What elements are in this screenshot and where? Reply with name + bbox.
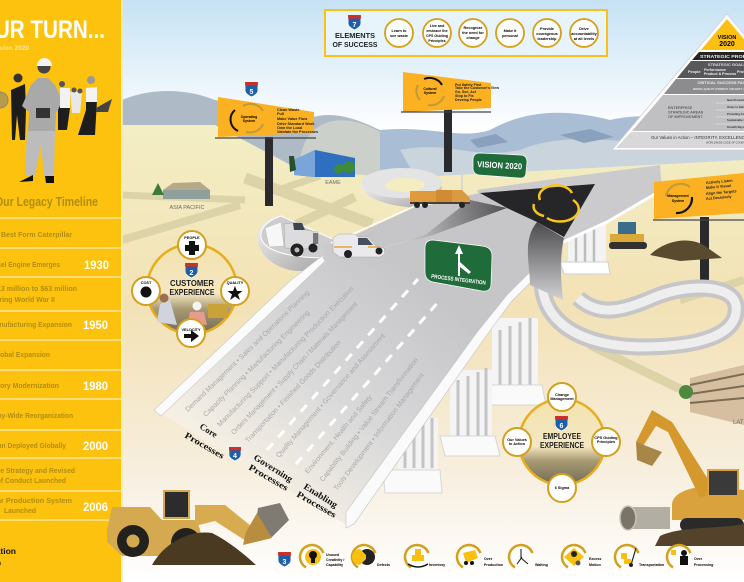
shield: 7: 7: [353, 22, 357, 29]
billboard: operating system: Make Value Flow: [277, 117, 307, 121]
icon: excess motion: Excess: [589, 557, 601, 561]
panel: left sidebar: [0, 0, 123, 582]
icon: over production: Over: [484, 557, 493, 561]
billboard: operating system: System: [243, 119, 255, 123]
pyramid: [612, 14, 744, 150]
photo figures: [157, 294, 228, 325]
dirt pile: excavator: [655, 524, 744, 546]
white semi truck: [265, 222, 319, 256]
sign: Vision 2020: [462, 153, 527, 190]
sign: Process Integration: PROCESS INTEGRATION: [431, 274, 486, 287]
billboard: cultural system: [401, 72, 499, 112]
category labels: [183, 421, 340, 520]
mountains: [122, 91, 744, 185]
element: courageous leadership: leadership: [538, 37, 557, 41]
bulldozer: right: [609, 222, 647, 249]
icon: waiting: [505, 541, 548, 573]
ground: [120, 125, 744, 582]
orange tanker truck: [410, 190, 470, 208]
billboard: operating system: Clean Waste: [277, 108, 299, 112]
right barrier: [346, 272, 533, 528]
timeline years: 2006: [83, 500, 108, 514]
timeline years: 1980: [83, 379, 108, 393]
timeline years: 1930: [84, 258, 109, 272]
legend: eight wastes: [296, 541, 713, 573]
process labels on road: Manufacturing Support • Manufacturing Production Execution: [216, 286, 355, 428]
upper rim: [331, 198, 470, 243]
process labels on road: Transportation • Finished Goods Distribution: [244, 339, 343, 444]
icon: unused creativity: Creativity /: [326, 558, 344, 562]
billboard: cultural system: Stop to Fix: [455, 94, 474, 98]
node: cost: COST: [141, 281, 152, 285]
element: courageous leadership: Provide: [540, 27, 554, 31]
billboard: management system: Act Decisively: [706, 195, 733, 201]
category labels: Processes: [183, 430, 227, 461]
shield: 3: [278, 552, 291, 567]
timeline years: 1950: [83, 318, 108, 332]
element: courageous leadership: courageous: [536, 32, 558, 36]
billboard: cultural system: System: [424, 91, 436, 95]
arm white edge: [563, 194, 655, 242]
upper road dark shadow: [375, 200, 507, 250]
element: courageous leadership: [533, 19, 561, 47]
element: live and embrace: CPS Guiding: [426, 34, 448, 38]
building: Asia Pacific: [152, 182, 210, 211]
billboard: cultural system: Take the Customer's View: [455, 86, 499, 90]
element: recognize the need: the need for: [462, 31, 484, 35]
billboard: operating system: [215, 97, 318, 138]
node: guiding principles: [592, 428, 620, 456]
process labels on road: Demand Management • Sales and Operations Planning: [185, 290, 311, 413]
heading: CUSTOMER: [170, 278, 214, 288]
building: Latin America: [679, 365, 744, 426]
process labels on road: Capacity Planning • Manufacturing Engineering: [202, 309, 311, 418]
panel: employee experience: [503, 383, 620, 502]
billboard pole: cultural: [444, 108, 452, 172]
node: quality: QUALITY: [227, 281, 244, 285]
category labels: Governing: [252, 452, 295, 484]
icon: circular arrows: [534, 185, 579, 221]
node: guiding principles: Principles: [597, 440, 615, 444]
icon: transportation: [611, 541, 664, 573]
icon: inventory: Inventory: [429, 563, 445, 567]
pyramid tier: vision 2020: VISION: [718, 35, 736, 41]
building: Latin America: LAT: [733, 420, 744, 426]
category labels: Enabling: [302, 481, 340, 510]
icon: unused creativity: Capability: [326, 563, 343, 567]
icon: waiting: Waiting: [535, 563, 548, 567]
icon: over processing: Processing: [694, 563, 713, 567]
category labels: Core: [198, 421, 219, 440]
icon: over processing: Over: [694, 557, 703, 561]
icon: excess motion: Motion: [589, 563, 601, 567]
timeline years: [83, 258, 109, 514]
node: people: PEOPLE: [184, 236, 200, 240]
pyramid tier: strategic goals: [677, 61, 744, 78]
panel: customer experience: [132, 231, 249, 347]
billboard: operating system: Operating: [241, 115, 257, 119]
icon: inventory: [401, 541, 445, 573]
element: learn to see waste: [385, 19, 413, 47]
panel: customer experience: EXPERIENCE: [170, 287, 215, 297]
pyramid tier: enterprise areas: STRATEGIC AREAS: [668, 110, 704, 114]
shield: 2: 2: [190, 270, 194, 277]
element: live and embrace: [423, 19, 451, 47]
billboard: management system: Management: [667, 194, 690, 198]
element: live and embrace: embrace the: [426, 29, 448, 33]
wheel loader: [107, 491, 289, 558]
workers photo group: [0, 58, 112, 183]
building: Asia Pacific: ASIA PACIFIC: [169, 205, 205, 211]
shield: 5: 5: [250, 89, 254, 96]
black interchange wedge: [480, 184, 595, 237]
billboard pole: management: [700, 217, 709, 281]
ring ramp: [362, 168, 442, 208]
shield: 3: 3: [283, 559, 287, 566]
sign: Vision 2020: VISION 2020: [477, 159, 523, 171]
element: learn to see waste: see waste: [390, 34, 408, 38]
element: recognize the need: Recognize: [464, 26, 482, 30]
pyramid tier: strategic goals: Performance: [704, 68, 726, 72]
shield: 6: 6: [560, 423, 564, 430]
pyramid tier: strategic goals: Product & Process: [704, 72, 736, 76]
timeline years: 2000: [83, 439, 108, 453]
element: live and embrace: Live and: [430, 24, 444, 28]
pyramid tier: vision 2020: [701, 19, 744, 50]
center ramp: [528, 222, 564, 300]
icon: unused creativity: Unused: [326, 553, 339, 557]
pyramid tier: enterprise areas: [632, 95, 744, 131]
billboard: operating system: Own the Load: [277, 126, 303, 130]
pyramid tier: critical success factors: [664, 79, 744, 94]
billboard: cultural system: Put Safety First: [455, 83, 482, 87]
shield: 5: [245, 82, 258, 97]
process labels on road: [185, 286, 426, 492]
billboard: management system: Align the Targets: [706, 189, 737, 196]
footer text: [0, 546, 16, 567]
timeline events: [0, 230, 77, 515]
billboard: cultural system: Develop People: [455, 98, 482, 102]
node: our values: In Action: [509, 442, 526, 446]
ground paths: [122, 176, 744, 420]
node: change management: Management: [550, 397, 574, 401]
icon: transportation: Transportation: [639, 563, 664, 567]
billboard: operating system: Validate the Processes: [277, 130, 318, 134]
element: live and embrace: Principles: [428, 39, 446, 43]
process labels on road: Tools Development • Information Management: [333, 372, 426, 492]
left barrier: [154, 256, 325, 416]
highway surface: [160, 193, 537, 526]
dirt pile: right: [650, 240, 722, 261]
element: recognize the need: [459, 19, 487, 47]
shield: 4: 4: [233, 453, 237, 460]
node: 6 sigma: 6 Sigma: [555, 486, 570, 490]
icon: over processing: [663, 541, 713, 573]
lane dashes: [267, 279, 440, 464]
pillars: [383, 318, 546, 493]
element: drive accountability: Drive: [579, 27, 589, 31]
excavator: [636, 410, 744, 532]
icon: over production: Production: [484, 563, 503, 567]
billboard: operating system: Drive Standard Work: [277, 122, 315, 126]
process labels on road: Orders Management • Supply Chain / Materials Management: [230, 301, 359, 436]
icon: unused creativity: [296, 541, 344, 573]
pyramid tier: values in action: [616, 132, 744, 148]
heading: ELEMENTS: [335, 31, 375, 40]
billboard pole: operating: [265, 137, 273, 206]
billboard: management system: Actively Listen: [706, 179, 733, 185]
icon: over production: [453, 541, 503, 573]
element: drive accountability: [570, 19, 598, 47]
node: change management: Change: [555, 393, 569, 397]
right flyover arm: [477, 165, 662, 290]
process labels on road: Capability Building • Value Stream Transformation: [319, 357, 420, 483]
element: drive accountability: at all levels: [574, 37, 594, 41]
timeline dividers: [0, 218, 121, 520]
panel: seven elements of success: OF SUCCESS: [332, 40, 378, 49]
sky: [120, 0, 744, 130]
element: make it personal: personal: [502, 34, 518, 38]
element: drive accountability: accountability: [571, 32, 598, 36]
element: make it personal: Make it: [504, 29, 517, 33]
billboard: management system: [653, 173, 744, 220]
pyramid tier: vision 2020: 2020: [719, 41, 735, 48]
process labels on road: Quality Management • Governance and Assessment: [275, 332, 387, 459]
icon: defects: Defects: [377, 563, 390, 567]
node: velocity: VELOCITY: [182, 328, 201, 332]
pipe: [620, 506, 670, 530]
right swirl ramp: [542, 262, 736, 347]
white pickup truck: [333, 234, 385, 258]
pyramid tier: enterprise areas: OF IMPROVEMENT: [668, 115, 703, 119]
element: make it personal: [496, 19, 524, 47]
billboard: operating system: Pull: [277, 112, 284, 116]
shield: 4: [229, 447, 241, 461]
node: guiding principles: CPS Guiding: [594, 436, 618, 440]
category labels: Processes: [247, 462, 291, 493]
building: EAME: EAME: [325, 180, 341, 186]
node: our values: Our Values: [507, 438, 527, 442]
panel: seven elements of success: [325, 10, 607, 56]
process labels on road: Environment, Health and Safety: [304, 394, 374, 475]
billboard: cultural system: Cultural: [423, 87, 437, 91]
dirt pile: foreground: [152, 533, 256, 565]
billboard: cultural system: Go, See, Act: [455, 90, 477, 94]
sign: Process Integration: [425, 240, 492, 291]
panel: employee experience: EXPERIENCE: [540, 441, 585, 450]
pyramid tier: strategic goals: People: [688, 70, 700, 74]
node: change management: [548, 383, 576, 411]
icon: excess motion: [558, 541, 601, 573]
shield: 7: [348, 15, 361, 30]
category labels: Processes: [295, 489, 339, 520]
heading: EMPLOYEE: [543, 432, 582, 441]
building: EAME: [289, 150, 355, 186]
icon: defects: [348, 541, 390, 573]
right pier: [560, 224, 610, 274]
node: our values: [503, 428, 531, 456]
billboard: management system: Make It Visual: [706, 184, 731, 190]
element: recognize the need: change: [466, 36, 480, 40]
timeline events: Launched: [4, 506, 36, 515]
left loop ramp: [258, 215, 335, 271]
element: learn to see waste: Learn to: [392, 29, 407, 33]
billboard: management system: System: [672, 199, 684, 203]
timeline events: Best Form Caterpillar: [1, 230, 72, 239]
pyramid tier: enterprise areas: ENTERPRISE: [668, 106, 693, 110]
pyramid tier: strategic profile: [692, 52, 744, 60]
